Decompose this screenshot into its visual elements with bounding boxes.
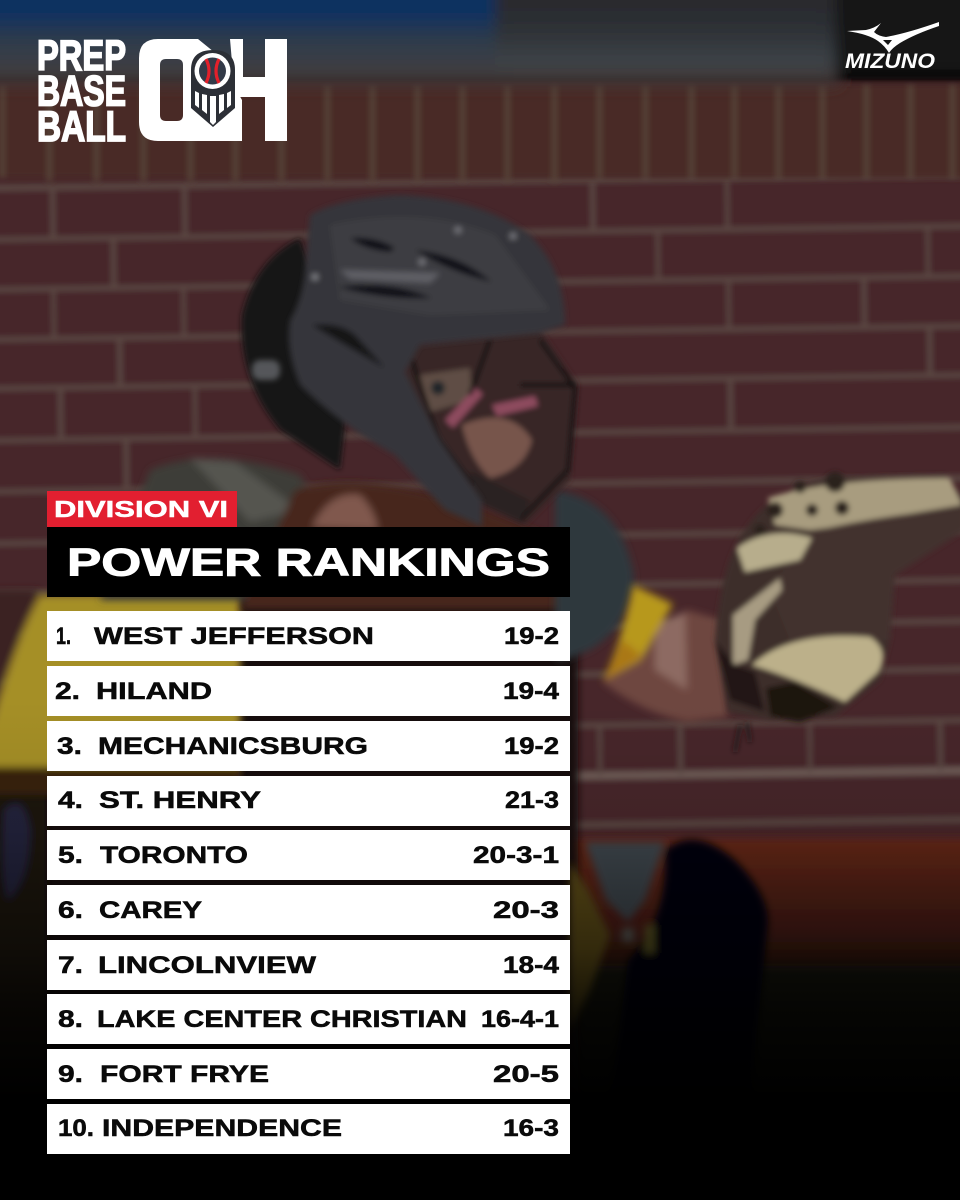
row 8: Lake Center Christian: 8. [58, 1006, 83, 1033]
row 1: West Jefferson: WEST JEFFERSON [94, 623, 374, 650]
row 3: Mechanicsburg: 19-2 [504, 733, 559, 760]
row 9: Fort Frye: FORT FRYE [100, 1061, 269, 1088]
orange base of wall [560, 838, 960, 968]
row 9: Fort Frye [47, 1049, 570, 1099]
player: torso, neck and chest protector [100, 458, 570, 610]
player: shoulder pad [555, 490, 634, 660]
division tag [47, 491, 237, 527]
row 6: Carey: 20-3 [493, 897, 559, 924]
row 1: West Jefferson: 1. [56, 623, 71, 650]
mask and face [405, 330, 578, 525]
logo wordmark: BALL [37, 103, 126, 151]
rankings list [47, 611, 570, 1154]
row 3: Mechanicsburg [47, 721, 570, 771]
row 2: Hiland [47, 666, 570, 716]
row 7: Lincolnview: LINCOLNVIEW [98, 952, 317, 979]
row 2: Hiland: 2. [55, 678, 80, 705]
row 7: Lincolnview: 18-4 [503, 952, 559, 979]
row 2: Hiland: HILAND [96, 678, 212, 705]
player: catcher's mitt [715, 472, 960, 752]
row 7: Lincolnview [47, 940, 570, 990]
row 5: Toronto: 5. [58, 842, 83, 869]
title banner [47, 527, 570, 597]
Mizuno wordmark: MIZUNO [845, 50, 935, 73]
helmet shell [252, 195, 565, 527]
logo wordmark: PREP [37, 32, 126, 80]
logo letter H [230, 39, 287, 141]
player: jersey shoulder [0, 590, 240, 795]
row 7: Lincolnview: 7. [58, 952, 83, 979]
player: catcher's helmet and mask [242, 195, 578, 527]
row 10: Independence: 16-3 [503, 1115, 559, 1142]
division tag: DIVISION VI [54, 496, 228, 522]
row 10: Independence [47, 1104, 570, 1154]
row 3: Mechanicsburg: 3. [57, 733, 82, 760]
row 8: Lake Center Christian [47, 994, 570, 1044]
player: forearm and wristband [603, 585, 728, 722]
dark ground [560, 966, 960, 1200]
row 2: Hiland: 19-4 [503, 678, 559, 705]
row 4: St. Henry: ST. HENRY [99, 787, 261, 814]
row 6: Carey: CAREY [99, 897, 202, 924]
logo baseball shield [191, 50, 235, 127]
player: lower body [0, 770, 768, 1100]
logo: Prep Baseball Ohio [37, 32, 287, 151]
row 1: West Jefferson: 19-2 [504, 623, 559, 650]
logo numeral zero [139, 39, 242, 141]
back of the head [242, 238, 350, 470]
row 3: Mechanicsburg: MECHANICSBURG [98, 733, 368, 760]
row 8: Lake Center Christian: LAKE CENTER CHRISTIAN [97, 1006, 467, 1033]
row 10: Independence: 10. [58, 1115, 94, 1142]
row 4: St. Henry [47, 776, 570, 826]
vertical joints [50, 189, 56, 237]
row 1: West Jefferson [47, 611, 570, 661]
row 8: Lake Center Christian: 16-4-1 [481, 1006, 559, 1033]
row 5: Toronto [47, 830, 570, 880]
logo wordmark [37, 32, 126, 151]
dark figure behind the list [30, 590, 578, 1180]
row 9: Fort Frye: 9. [58, 1061, 83, 1088]
row 6: Carey: 6. [58, 897, 83, 924]
row 4: St. Henry: 4. [58, 787, 83, 814]
row 4: St. Henry: 21-3 [505, 787, 559, 814]
soldier course of bricks [0, 84, 960, 182]
dark fade toward the bottom [0, 700, 960, 1200]
row 5: Toronto: TORONTO [100, 842, 248, 869]
logo wordmark: BASE [37, 68, 126, 116]
row 9: Fort Frye: 20-5 [493, 1061, 559, 1088]
row 10: Independence: INDEPENDENCE [102, 1115, 342, 1142]
blurred stadium band at top [0, 0, 960, 86]
logo: Mizuno [845, 22, 939, 73]
row 5: Toronto: 20-3-1 [473, 842, 559, 869]
row 6: Carey [47, 885, 570, 935]
title banner: POWER RANKINGS [67, 542, 550, 584]
Mizuno run-bird mark [847, 22, 939, 53]
